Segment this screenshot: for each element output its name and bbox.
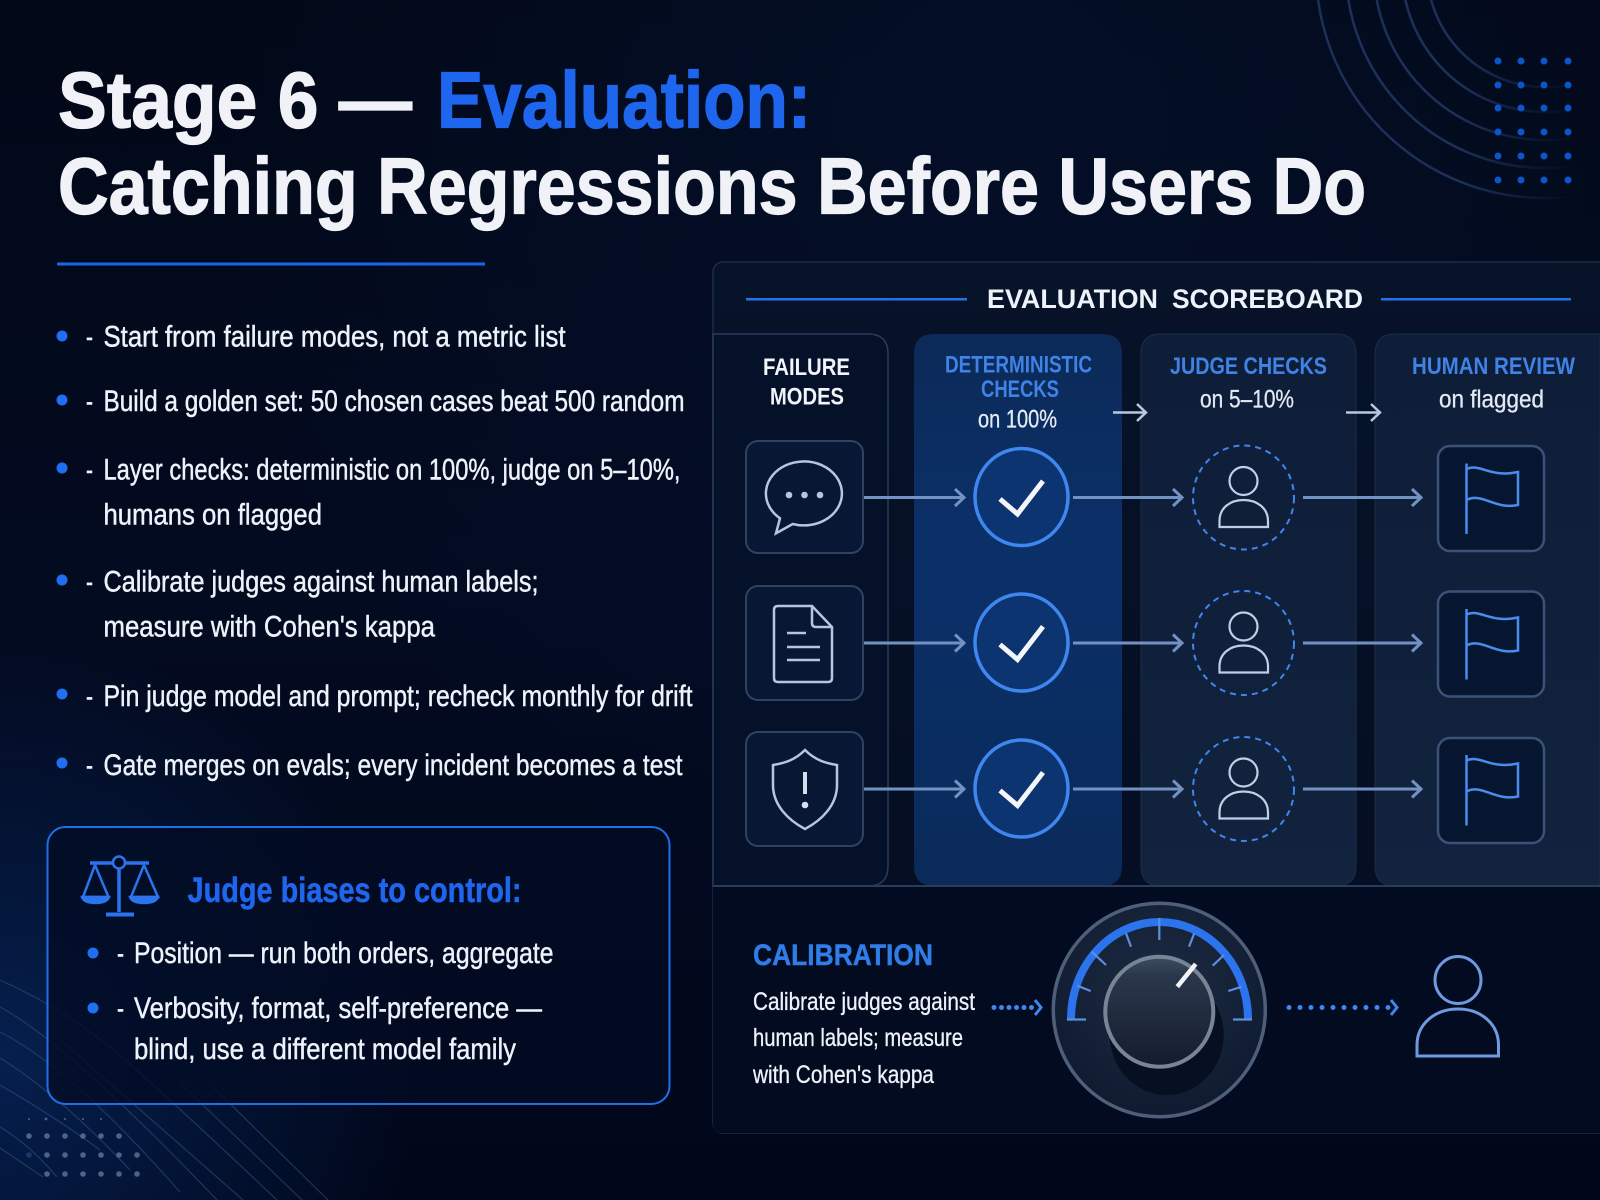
title: Stage 6 — — [58, 56, 412, 144]
icon: judge — [1193, 446, 1294, 550]
bullet list: Pin judge model and prompt; recheck monthly for drift — [104, 680, 693, 713]
row 1: conversation failure — [746, 441, 1544, 553]
bullet list: - — [86, 385, 93, 418]
column: deterministic checks: CHECKS — [981, 376, 1059, 403]
icon: shield — [746, 732, 863, 846]
column: human review — [1375, 334, 1600, 886]
arrow: deterministic to judge — [1113, 404, 1146, 421]
arrow: judge to human — [1346, 404, 1380, 421]
decoration: top-right dot grid — [1494, 58, 1572, 184]
scoreboard heading — [746, 284, 1571, 314]
bullet list — [56, 320, 693, 782]
callout bullets: blind, use a different model family — [134, 1033, 516, 1066]
callout bullets — [88, 937, 554, 1066]
scoreboard heading: SCOREBOARD — [1172, 284, 1363, 314]
title: Catching Regressions Before Users Do — [58, 142, 1366, 230]
column: deterministic checks: on 100% — [978, 406, 1057, 434]
arrows: row 3 — [864, 780, 1421, 798]
title — [58, 56, 1366, 230]
icon: judge — [1193, 591, 1294, 695]
decoration: bottom-left dot grid — [26, 1118, 140, 1177]
icon: flag — [1438, 446, 1544, 551]
bullet list: humans on flagged — [104, 498, 322, 532]
column: failure modes: FAILURE — [763, 354, 850, 381]
panel: calibration — [713, 886, 1600, 1133]
decoration: top-right arcs — [1316, 0, 1600, 198]
callout bullets: Verbosity, format, self-preference — — [134, 992, 542, 1025]
title: Evaluation: — [437, 56, 811, 144]
column: deterministic checks — [914, 334, 1122, 886]
column: failure modes: MODES — [770, 384, 844, 410]
icon: document — [746, 586, 863, 700]
calibration text: human labels; measure — [753, 1024, 963, 1052]
calibration text: Calibrate judges against — [753, 988, 975, 1016]
row 2: document failure — [746, 586, 1544, 700]
icon: check — [975, 740, 1068, 837]
scoreboard heading: EVALUATION — [987, 284, 1158, 314]
icon: judge — [1193, 737, 1294, 841]
arrow: dotted to dial — [994, 1000, 1041, 1015]
column: failure modes — [713, 334, 888, 886]
decoration: bottom-left lines — [0, 980, 328, 1200]
callout heading: Judge biases to control: — [188, 871, 522, 910]
calibration text — [752, 988, 975, 1089]
column: deterministic checks: DETERMINISTIC — [945, 352, 1092, 378]
bullet list: - — [86, 749, 93, 782]
calibration heading: CALIBRATION — [753, 939, 933, 972]
icon: flag — [1438, 738, 1544, 843]
title rule — [57, 262, 485, 266]
icon: balance scales — [82, 856, 158, 914]
icon: speech bubble — [746, 441, 863, 553]
column: judge checks: JUDGE CHECKS — [1170, 353, 1327, 380]
bullet list: - — [86, 320, 93, 354]
calibration text: with Cohen's kappa — [752, 1061, 934, 1089]
bullet list: - — [86, 566, 93, 598]
arrows: row 1 — [864, 489, 1421, 506]
icon: check — [975, 448, 1068, 546]
icon: calibration dial — [1053, 903, 1265, 1117]
row 3: safety failure — [746, 732, 1544, 846]
column: judge checks: on 5–10% — [1200, 386, 1294, 414]
bullet list: Gate merges on evals; every incident becomes a test — [104, 749, 683, 782]
bullet list: Calibrate judges against human labels; — [104, 566, 538, 598]
panel: judge biases callout — [48, 827, 670, 1104]
panel: evaluation scoreboard — [713, 262, 1600, 1133]
callout bullets: - — [117, 937, 124, 970]
icon: check — [975, 594, 1068, 691]
bullet list: Start from failure modes, not a metric list — [104, 320, 566, 354]
bullet list: Build a golden set: 50 chosen cases beat 500 random — [104, 385, 684, 418]
bullet list: Layer checks: deterministic on 100%, judge on 5–10%, — [104, 454, 680, 486]
callout bullets: Position — run both orders, aggregate — [134, 937, 554, 970]
bullet list: measure with Cohen's kappa — [104, 610, 435, 644]
icon: human reviewer — [1417, 956, 1498, 1056]
icon: flag — [1438, 592, 1544, 696]
arrows: row 2 — [864, 634, 1421, 652]
callout bullets: - — [117, 992, 124, 1025]
bullet list: - — [86, 454, 93, 486]
bullet list: - — [86, 680, 93, 713]
arrow: dotted to person — [1289, 1000, 1397, 1015]
column: human review: on flagged — [1439, 386, 1544, 414]
column: judge checks — [1141, 334, 1356, 886]
